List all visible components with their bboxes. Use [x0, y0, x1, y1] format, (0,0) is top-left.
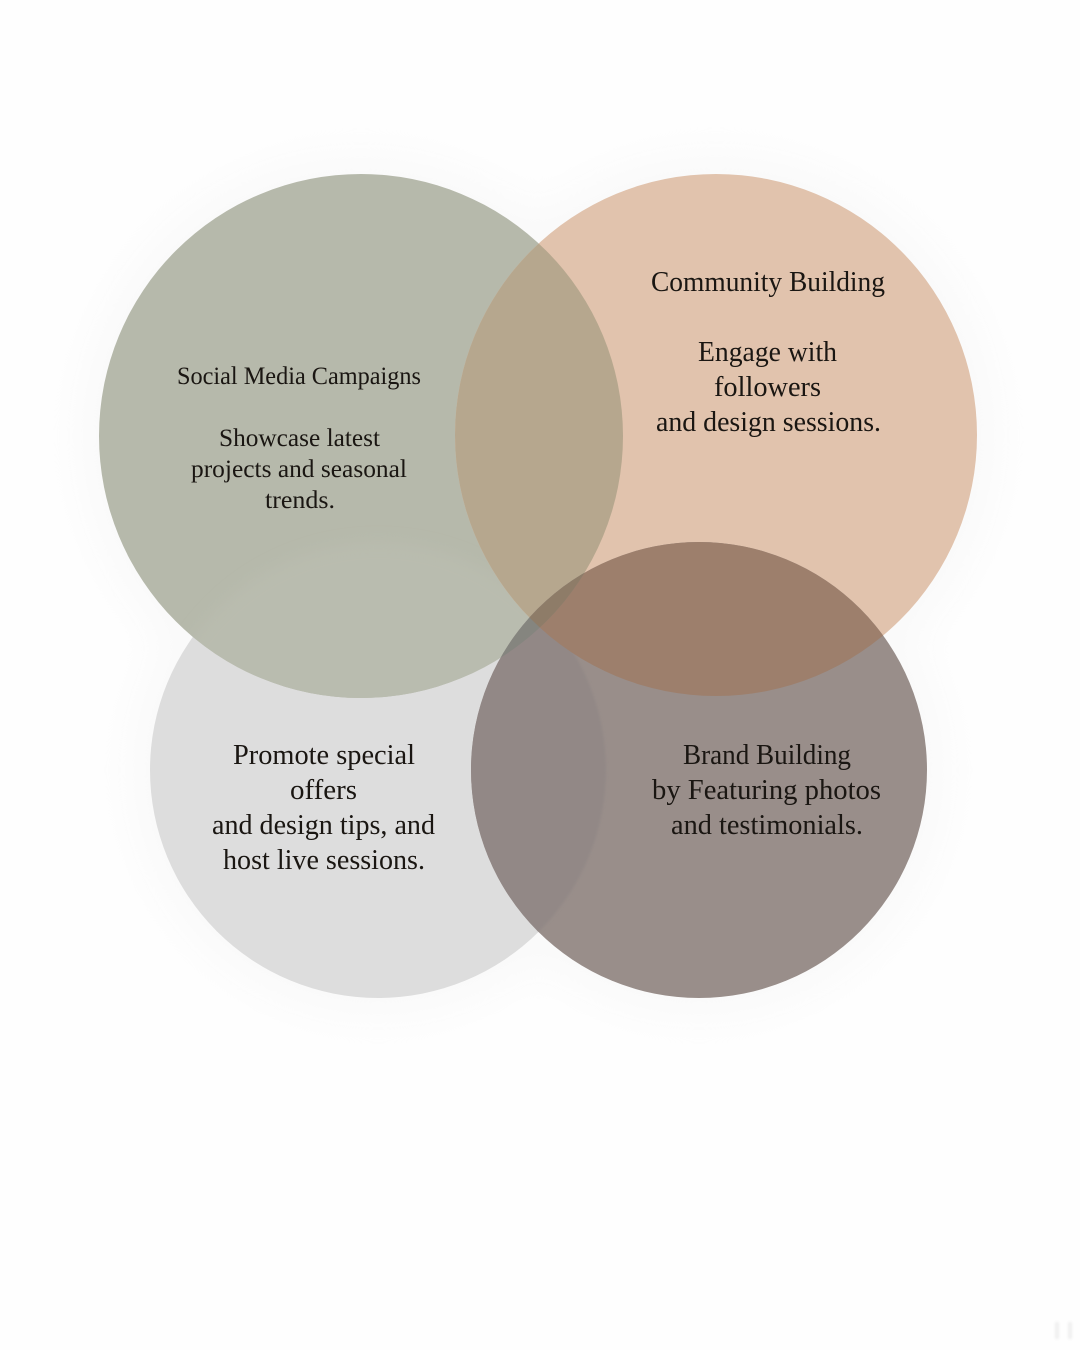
text: brand building: and testimonials.	[671, 810, 863, 841]
circle: sage green (social media)	[99, 174, 623, 698]
text: social media campaigns: Showcase latest	[219, 425, 380, 452]
overlap: green and grey	[198, 641, 500, 698]
text: promote special offers: host live sessions.	[223, 845, 425, 876]
text: community building: and design sessions.	[656, 407, 881, 438]
text: social media campaigns: trends.	[265, 487, 335, 514]
overlap: taupe and peach	[540, 542, 883, 696]
circle: taupe (brand)	[471, 542, 927, 998]
text: promote special offers: Promote special	[233, 740, 415, 771]
text: brand building: by Featuring photos	[652, 775, 881, 806]
text: community building: Engage with	[698, 337, 837, 368]
text: social media campaigns	[177, 363, 421, 514]
circle: peach (community)	[455, 174, 977, 696]
overlap: green and peach	[455, 244, 623, 618]
faint corner mark	[1055, 1322, 1072, 1339]
text: social media campaigns: projects and seasonal	[191, 456, 407, 483]
text: brand building	[652, 740, 881, 841]
text: promote special offers: and design tips, and	[212, 810, 435, 841]
text: brand building: Brand Building	[683, 740, 851, 771]
text: community building	[651, 267, 885, 438]
overlap: taupe and green	[501, 618, 540, 657]
overlap: taupe and grey	[471, 658, 539, 932]
text: community building: followers	[714, 372, 821, 403]
venn diagram infographic	[99, 174, 1072, 1338]
text: social media campaigns: Social Media Campaigns	[177, 363, 421, 390]
overlap: taupe, green and peach	[530, 573, 584, 628]
text: community building: Community Building	[651, 267, 885, 298]
text: promote special offers	[212, 740, 435, 876]
text: promote special offers: offers	[290, 775, 357, 806]
circle: grey (promotions)	[150, 542, 606, 998]
